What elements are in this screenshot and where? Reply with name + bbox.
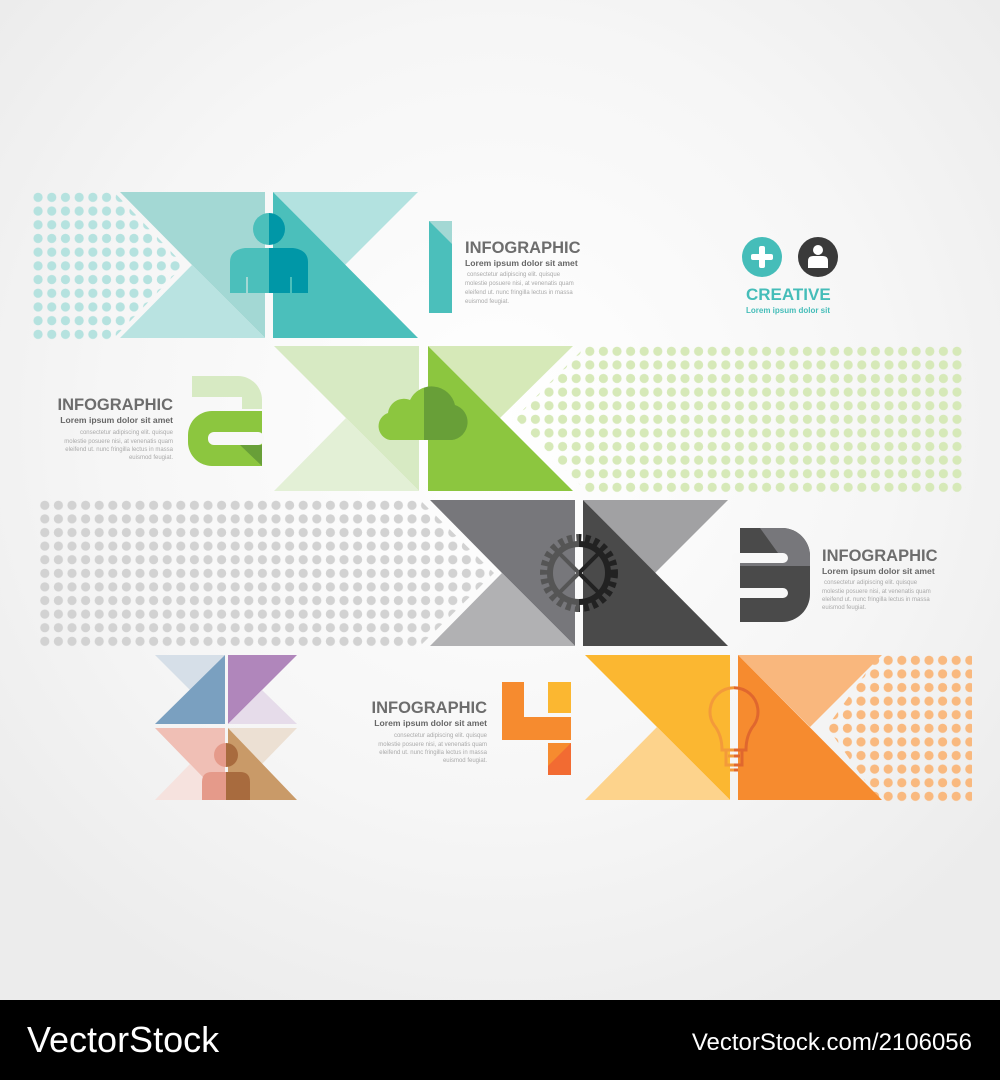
- icon: gear: [544, 538, 614, 608]
- text block 4: consectetur adipiscing elit. quisque: [394, 733, 488, 739]
- tile gray left: [430, 500, 575, 646]
- text block 4: molestie posuere nisi, at venenatis quam: [378, 742, 487, 748]
- icon: cloud: [379, 386, 468, 440]
- small tiles: [155, 655, 297, 800]
- dots green: [515, 344, 966, 493]
- row 4: [155, 653, 972, 802]
- text block 4: [372, 699, 488, 764]
- dots gray: [38, 498, 494, 648]
- text block 3: eleifend ut. nunc fringilla lectus in massa: [822, 597, 930, 603]
- text block 4: INFOGRAPHIC: [372, 699, 487, 717]
- text block 3: INFOGRAPHIC: [822, 547, 938, 565]
- text block 2: [58, 396, 174, 461]
- text block 2: consectetur adipiscing elit. quisque: [80, 430, 174, 436]
- text block 3: [822, 547, 938, 611]
- footer: VectorStock.com/2106056: [692, 1029, 972, 1056]
- text block 3: molestie posuere nisi, at venenatis quam: [822, 589, 931, 595]
- text block 2: INFOGRAPHIC: [58, 396, 173, 414]
- tile orange left: [585, 655, 730, 800]
- text block 2: Lorem ipsum dolor sit amet: [60, 415, 173, 425]
- text block 2: eleifend ut. nunc fringilla lectus in massa: [65, 447, 174, 453]
- number 3: [732, 528, 810, 622]
- creative heading: [746, 285, 831, 315]
- tile orange right: [738, 655, 882, 800]
- text block 3: euismod feugiat.: [822, 605, 866, 611]
- tile green right: [428, 346, 573, 491]
- dots orange: [827, 653, 972, 802]
- text block 4: Lorem ipsum dolor sit amet: [374, 718, 487, 728]
- tile green left: [274, 346, 419, 491]
- footer: [0, 1000, 1000, 1080]
- text block 1: INFOGRAPHIC: [465, 239, 581, 257]
- tile teal right: [273, 192, 418, 338]
- tile teal left: [120, 192, 265, 338]
- row 1: teal: [31, 190, 838, 340]
- tile gray right: [583, 500, 728, 646]
- number 2: [188, 376, 264, 466]
- text block 3: Lorem ipsum dolor sit amet: [822, 566, 935, 576]
- number 1: [429, 221, 452, 313]
- text block 4: euismod feugiat.: [443, 758, 487, 764]
- creative heading: CREATIVE: [746, 285, 831, 304]
- text block 1: euismod feugiat.: [465, 299, 509, 305]
- creative icons: [742, 237, 838, 277]
- creative heading: Lorem ipsum dolor sit: [746, 306, 830, 315]
- text block 3: consectetur adipiscing elit. quisque: [824, 580, 918, 586]
- text block 2: euismod feugiat.: [129, 455, 173, 461]
- text block 1: eleifend ut. nunc fringilla lectus in massa: [465, 290, 573, 296]
- row 2: green: [58, 344, 966, 493]
- text block 1: molestie posuere nisi, at venenatis quam: [465, 281, 574, 287]
- icon: bulb: [710, 688, 758, 770]
- footer: VectorStock: [27, 1019, 220, 1060]
- text block 4: eleifend ut. nunc fringilla lectus in massa: [379, 750, 488, 756]
- row 3: gray: [38, 498, 938, 648]
- text block 1: [465, 239, 581, 305]
- text block 1: consectetur adipiscing elit. quisque: [467, 272, 561, 278]
- text block 1: Lorem ipsum dolor sit amet: [465, 258, 578, 268]
- number 4: [502, 682, 571, 775]
- text block 2: molestie posuere nisi, at venenatis quam: [64, 439, 173, 445]
- icon: person: [230, 213, 308, 293]
- icon: small person: [202, 743, 250, 800]
- dots teal: [31, 190, 184, 340]
